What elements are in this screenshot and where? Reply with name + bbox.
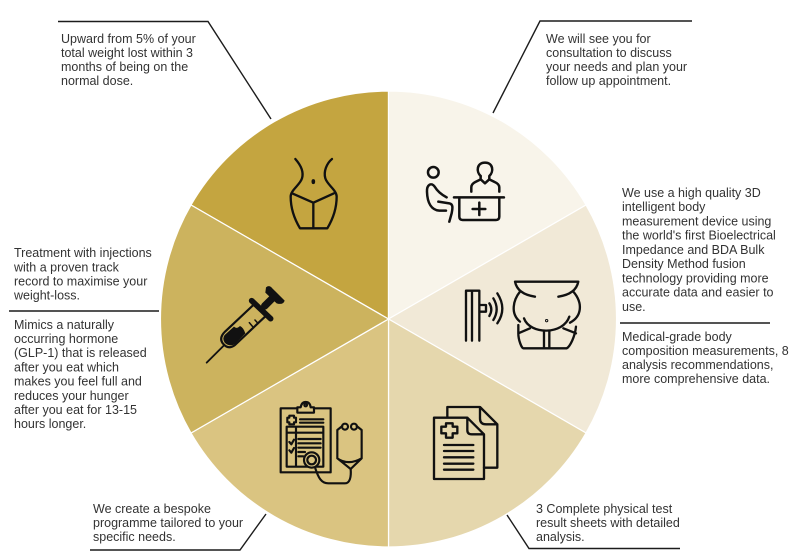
callout: body measurement device: Impedance and BDA Bulk [622,243,765,257]
callout: injections [9,246,159,431]
slice: bespoke programme [191,319,388,547]
callout: body measurement device: the world's first Bioelectrical [622,228,776,242]
callout: injections: hours longer. [14,417,86,431]
callout: consultation: your needs and plan your [546,60,687,74]
callout: body measurement device: analysis recommendations, [622,358,773,372]
callout: consultation: We will see you for [546,32,651,46]
callout: body measurement device [620,186,789,386]
callout: injections: weight-loss. [13,288,80,302]
callout: body measurement device: more comprehensive data. [622,372,770,386]
callout: injections: (GLP-1) that is released [14,346,147,360]
callout: injections: after you eat which [14,360,119,374]
slice: results [191,91,388,319]
icon: clipboard and stethoscope [281,402,362,483]
callout: injections: makes you feel full and [14,374,142,388]
icon: body scanner [466,282,580,348]
icon: syringe [207,286,285,363]
callout: body measurement device: Density Method fusion [622,257,746,271]
callout: bespoke programme [90,502,266,550]
callout: body measurement device: intelligent body [622,200,706,214]
callout: injections: with a proven track [13,260,120,274]
callout: injections: record to maximise your [14,274,147,288]
callout: body measurement device: We use a high quality 3D [622,186,761,200]
callout: consultation: follow up appointment. [546,74,671,88]
callout: result sheets: 3 Complete physical test [536,502,673,516]
callout: results: total weight lost within 3 [61,46,193,60]
slice: result sheets [388,319,586,547]
callout: result sheets: analysis. [536,530,585,544]
callout: bespoke programme: specific needs. [93,530,176,544]
icon: consultation at desk [427,163,504,222]
callout: injections: after you eat for 13-15 [14,403,137,417]
callout: result sheets: result sheets with detailed [536,516,680,530]
callout: body measurement device: use. [622,300,646,314]
callout: body measurement device: accurate data and easier to [622,286,774,300]
callout: bespoke programme: programme tailored to your [93,516,243,530]
callout: injections: reduces your hunger [14,389,129,403]
callout: result sheets [507,502,680,548]
icon: result documents [434,407,497,479]
slice: consultation [388,91,586,319]
callout: results: Upward from 5% of your [61,32,196,46]
icon: waist [291,159,337,228]
callout: results: months of being on the [61,60,188,74]
slice: body measurement [388,205,617,433]
callout: consultation [493,21,692,113]
callout: body measurement device: technology providing more [622,272,769,286]
callout: injections: Treatment with injections [14,246,152,260]
callout: results: normal dose. [61,74,133,88]
callout: injections: occurring hormone [14,332,118,346]
callout: injections: Mimics a naturally [14,318,115,332]
pie chart [160,91,617,547]
callout: results [58,22,271,119]
callout: consultation: consultation to discuss [546,46,672,60]
callout: bespoke programme: We create a bespoke [93,502,211,516]
callout: body measurement device: Medical-grade body [622,330,733,344]
callout: body measurement device: composition measurements, 8 [622,344,789,358]
callout: body measurement device: measurement device using [622,214,771,228]
slice: injections [160,205,388,433]
